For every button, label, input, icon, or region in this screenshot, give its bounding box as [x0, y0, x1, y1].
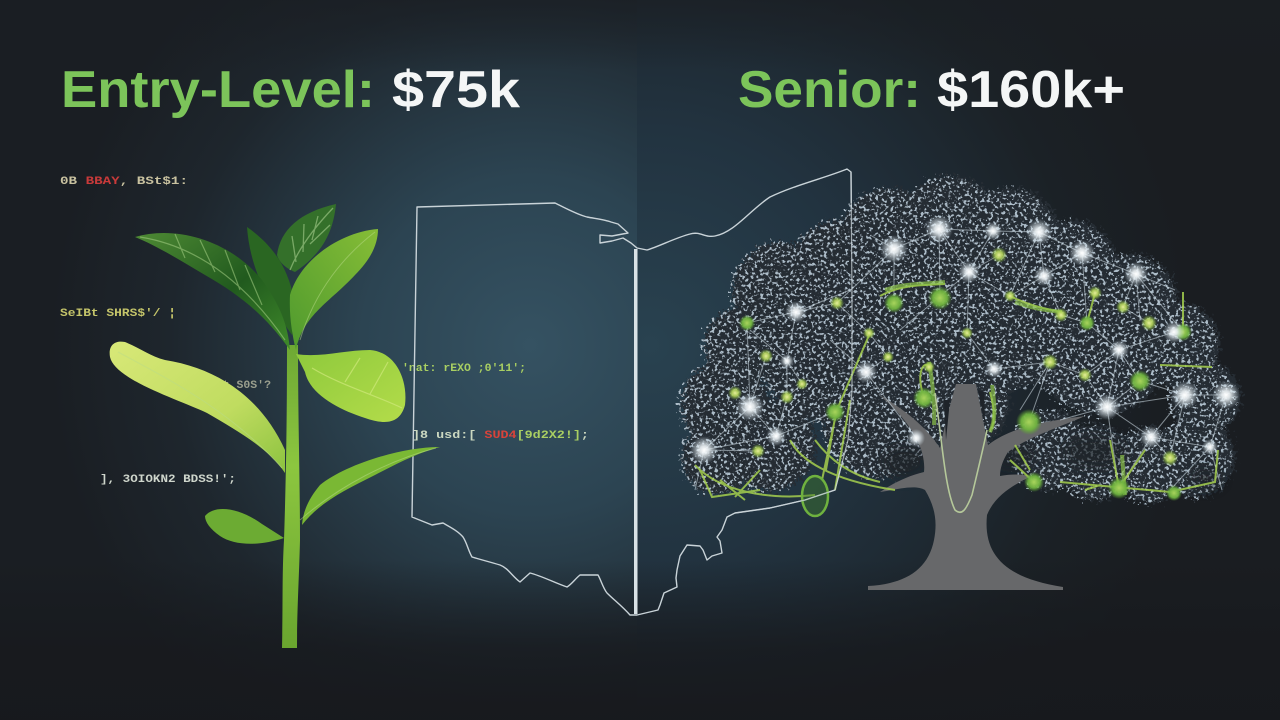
tree trunk and branches: [868, 384, 1085, 590]
heading: entry-level salary: Entry-Level:: [61, 61, 375, 119]
code snippets: Sxe3t S0S'?: [195, 380, 271, 392]
Ohio border crossing the canopy: [735, 172, 852, 513]
tree canopy texture: [681, 176, 1241, 503]
pale loop through trunk: [935, 393, 987, 512]
thick green vines: [885, 282, 1125, 495]
glowing white nodes: [690, 215, 1240, 464]
leaf: centre dark: [247, 227, 294, 335]
leaf: top back: [277, 204, 336, 272]
network connections: white: [695, 229, 1226, 490]
leaf: round right: [296, 350, 405, 422]
dark gaps in canopy: [883, 436, 1221, 488]
leaf: small bottom: [205, 509, 284, 544]
icon: seedling plant: [110, 204, 440, 648]
plant stem: [282, 345, 300, 648]
code snippets: 'nat: rEXO ;0'11';: [402, 363, 526, 375]
code snippets: [60, 176, 589, 486]
green loop nodes: [802, 476, 828, 516]
code snippets: ]8 usd:[ SUD4 [9d2X2!] ;: [412, 430, 589, 442]
Ohio state outline: [412, 169, 852, 615]
heading: senior salary: Senior:: [738, 61, 921, 119]
leaf: long lower right: [302, 447, 440, 525]
leaf: pale lower left: [110, 342, 285, 473]
heading: entry-level salary: $75k: [392, 61, 520, 119]
code snippets: ], 3OIOKN2 BDSS!';: [100, 474, 236, 486]
leaf: top left dark: [135, 233, 290, 350]
icon: neural network tree: [681, 172, 1241, 590]
leaf: upper right: [290, 229, 378, 350]
centre divider line: [634, 249, 638, 614]
code snippets: SeIBt SHRS$'/ ¦: [60, 308, 176, 320]
heading: senior salary: $160k+: [937, 61, 1125, 119]
trunk gaps: [944, 390, 985, 440]
network connections: green: [695, 284, 1218, 500]
glowing green nodes: [728, 247, 1192, 501]
code snippets: 0B BBAY , BSt$1:: [60, 176, 188, 188]
